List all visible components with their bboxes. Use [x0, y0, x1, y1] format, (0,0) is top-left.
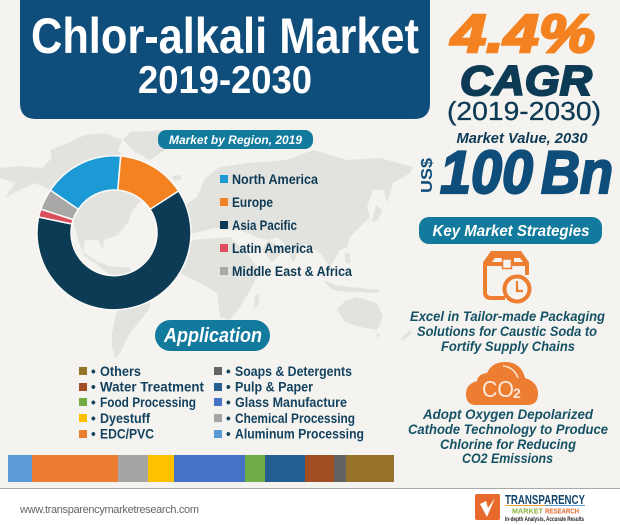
- strategy text: oxygen cathode: Cathode Technology to Produce: [408, 421, 608, 437]
- item: dyestuff: [79, 411, 150, 426]
- item: edc pvc: EDC/PVC: [100, 426, 154, 442]
- strategy text: packaging: Excel in Tailor-made Packaging: [410, 308, 605, 324]
- segment: north america: [50, 156, 121, 209]
- footer: [0, 488, 620, 525]
- CAGR period: (2019-2030): [447, 96, 601, 126]
- pill: market by region: Market by Region, 2019: [169, 133, 302, 147]
- item: chemical processing: Chemical Processing: [235, 411, 355, 426]
- item: glass manufacture: •: [226, 395, 231, 410]
- logo: transparency market research: In-depth Analysis, Accurate Results: [505, 517, 585, 523]
- logo: transparency market research: RESEARCH: [545, 506, 579, 516]
- logo: transparency market research: [475, 492, 585, 523]
- item: dyestuff: Dyestuff: [100, 411, 150, 426]
- segment: europe: [118, 156, 179, 209]
- item: aluminum processing: Aluminum Processing: [235, 426, 364, 442]
- CAGR block: [447, 4, 601, 126]
- logo: transparency market research: TRANSPARENCY: [505, 492, 585, 507]
- strategy text: oxygen cathode: [408, 406, 608, 466]
- CAGR label: CAGR: [460, 57, 593, 104]
- legend: middle east and africa: Middle East & Africa: [232, 263, 352, 279]
- item: water treatment: •: [91, 380, 96, 394]
- item: edc pvc: [79, 426, 154, 442]
- application stacked bar: [8, 455, 394, 482]
- strategy text: oxygen cathode: Adopt Oxygen Depolarized: [422, 406, 593, 422]
- item: edc pvc: •: [91, 426, 96, 442]
- title years: 2019-2030: [138, 59, 312, 102]
- market value number: 100: [440, 139, 533, 206]
- market value unit: Bn: [541, 139, 613, 206]
- CAGR value: 4.4%: [450, 4, 595, 64]
- item: others: •: [91, 364, 96, 379]
- pill: key market strategies: [419, 217, 602, 244]
- item: chemical processing: •: [226, 411, 231, 426]
- market value block: [419, 130, 613, 206]
- pill: market by region: [158, 130, 313, 149]
- segment: middle east and africa: [41, 190, 78, 220]
- segment: latin america: [39, 209, 73, 224]
- strategy text: packaging: Solutions for Caustic Soda to: [417, 323, 597, 339]
- world map background: [0, 130, 413, 358]
- item: glass manufacture: Glass Manufacture: [235, 395, 347, 410]
- icon: co2 cloud: [466, 362, 538, 405]
- currency: US$: [419, 158, 436, 193]
- pill: key market strategies: Key Market Strategies: [432, 223, 590, 240]
- item: aluminum processing: •: [226, 426, 231, 442]
- pill: application: Application: [163, 325, 262, 347]
- legend: asia pacific: Asia Pacific: [232, 217, 297, 233]
- item: others: Others: [100, 364, 141, 379]
- website url: www.transparencymarketresearch.com: [19, 504, 199, 516]
- title banner: [20, 0, 430, 119]
- strategy text: packaging: [410, 308, 605, 354]
- strategy text: oxygen cathode: CO2 Emissions: [462, 450, 553, 466]
- donut chart: [37, 156, 191, 310]
- item: soaps and detergents: Soaps & Detergents: [235, 364, 352, 379]
- icon: co2 cloud: 2: [513, 385, 521, 401]
- legend: latin america: Latin America: [232, 240, 313, 256]
- icon: co2 cloud: CO: [482, 376, 514, 402]
- logo: transparency market research: MARKET: [512, 506, 543, 516]
- segment: asia pacific: [37, 191, 191, 310]
- item: food processing: Food Processing: [100, 395, 196, 410]
- title text: Chlor-alkali Market: [31, 8, 419, 64]
- item: pulp and paper: Pulp & Paper: [235, 380, 314, 394]
- item: dyestuff: •: [91, 411, 96, 426]
- item: pulp and paper: •: [226, 380, 231, 394]
- pill: application: [155, 320, 270, 351]
- strategy text: oxygen cathode: Chlorine for Reducing: [440, 436, 576, 452]
- item: water treatment: Water Treatment: [100, 380, 204, 394]
- item: soaps and detergents: •: [226, 364, 231, 379]
- icon: package with clock: [485, 253, 530, 302]
- item: others: [79, 364, 141, 379]
- item: food processing: •: [91, 395, 96, 410]
- application legend: [79, 364, 364, 442]
- strategy text: packaging: Fortify Supply Chains: [441, 338, 575, 354]
- legend: north america: North America: [232, 171, 318, 187]
- market value label: Market Value, 2030: [456, 130, 588, 147]
- region legend: [220, 171, 352, 279]
- legend: europe: Europe: [232, 194, 273, 210]
